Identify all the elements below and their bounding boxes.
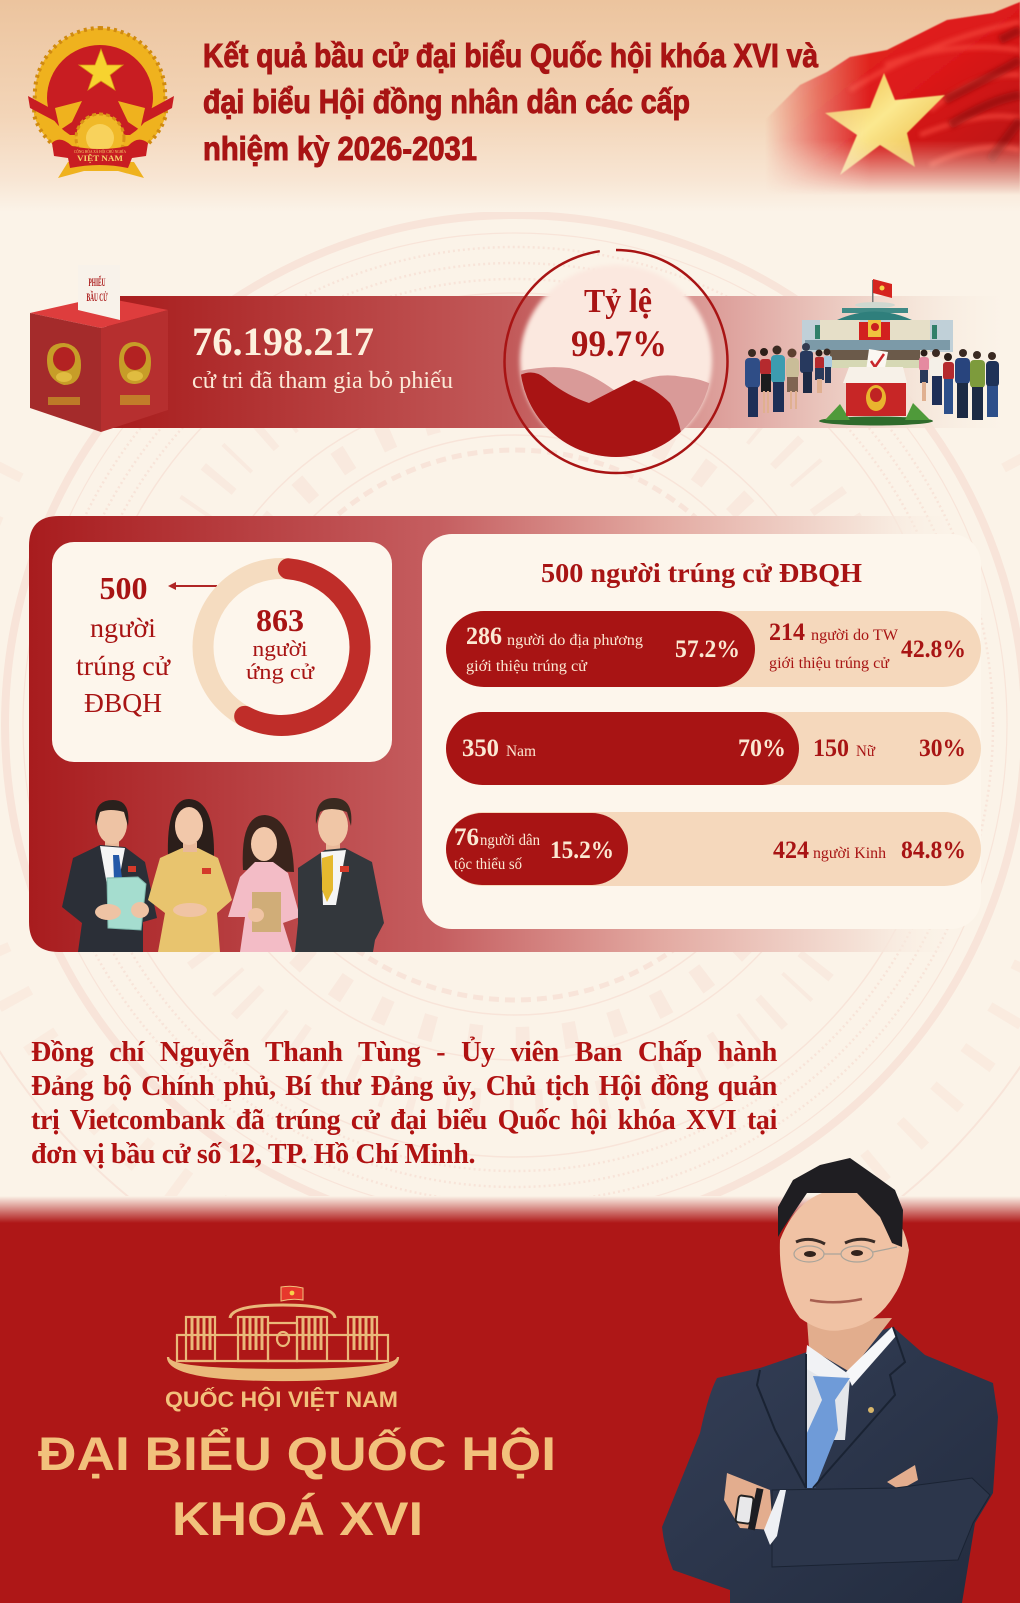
icon: national emblem: CỘNG HÒA XÃ HỘI CHỦ NGHĨA <box>74 149 126 154</box>
panel: candidates and elected breakdown <box>29 516 1000 952</box>
heading: 500 người trúng cử ĐBQH <box>541 558 862 588</box>
bar: nominating source: 286 <box>466 623 502 650</box>
shirt collars <box>805 1327 896 1386</box>
text block: Nguyễn Thanh Tùng statement: trị Vietcombank đã trúng cử đại biểu Quốc hội khóa XVI tại <box>31 1105 777 1136</box>
bar: ethnicity: người Kinh <box>813 845 886 862</box>
delegate: man with gold tie <box>295 798 384 952</box>
bar: nominating source: giới thiệu trúng cử <box>769 655 890 672</box>
icon: national emblem: VIỆT NAM <box>77 153 123 163</box>
ballot paper <box>78 265 120 320</box>
bar: ethnicity <box>446 812 981 886</box>
bar: nominating source: 214 <box>769 619 805 646</box>
bronze drum background pattern <box>0 212 1020 1196</box>
bar: ethnicity: tộc thiểu số <box>454 856 522 873</box>
folded arm <box>772 1478 990 1567</box>
bar: ethnicity: 424 <box>773 837 809 864</box>
candidates count text: ứng cử <box>246 659 315 684</box>
donut chart <box>196 562 367 732</box>
bar: gender <box>446 712 981 785</box>
elected count text: 500 <box>100 570 148 606</box>
ballot paper: PHIẾU <box>88 274 106 289</box>
bar: nominating source: 42.8% <box>901 636 966 663</box>
header background gradient <box>0 0 1020 212</box>
bar: ethnicity: 15.2% <box>550 837 614 864</box>
folded hands <box>724 1473 773 1530</box>
logo building <box>168 1305 398 1380</box>
card: 500 elected delegates <box>422 534 981 929</box>
icon: ballot box <box>30 265 168 432</box>
bar: gender: 350 <box>462 735 499 762</box>
card: candidates donut <box>52 542 392 762</box>
flag top right <box>760 2 1020 200</box>
bottom red panel <box>0 1196 1020 1603</box>
delegate: woman in pink ao dai <box>228 815 300 952</box>
chart: turnout gauge 99.7%: Tỷ lệ <box>584 283 652 320</box>
logo: Quốc hội Việt Nam <box>165 1286 398 1412</box>
voter crowd <box>745 343 999 420</box>
illustration: National Assembly building and voters <box>745 279 999 426</box>
bar: nominating source: giới thiệu trúng cử <box>466 658 588 675</box>
elected count text <box>76 570 171 718</box>
candidates count text: người <box>252 636 308 661</box>
bar: ethnicity: người dân <box>480 832 540 849</box>
glasses and eyes <box>794 1239 897 1302</box>
bar: ethnicity: 84.8% <box>901 837 966 864</box>
ballot box with check mark <box>819 349 933 426</box>
bar: ethnicity: 76 <box>454 824 479 851</box>
voter count: 76.198.217 <box>192 319 374 364</box>
wrist watch <box>735 1488 763 1530</box>
portrait: Nguyễn Thanh Tùng <box>662 1158 998 1603</box>
text block: Nguyễn Thanh Tùng statement: Đồng chí Nguyễn Thanh Tùng - Ủy viên Ban Chấp hành <box>31 1037 777 1068</box>
building <box>802 279 953 368</box>
heading: Đại biểu Quốc hội khoá XVI: ĐẠI BIỂU QUỐC HỘI <box>38 1427 556 1480</box>
title: đại biểu Hội đồng nhân dân các cấp <box>203 83 690 120</box>
text block: Nguyễn Thanh Tùng statement: đơn vị bầu cử số 12, TP. Hồ Chí Minh. <box>31 1139 475 1170</box>
text block: Nguyễn Thanh Tùng statement: Đảng bộ Chính phủ, Bí thư Đảng ủy, Chủ tịch Hội đồng quản <box>31 1071 777 1102</box>
text block: Nguyễn Thanh Tùng statement <box>31 1036 777 1170</box>
lapel shading <box>757 1327 905 1488</box>
title: Kết quả bầu cử đại biểu Quốc hội khóa XVI và <box>203 37 819 74</box>
logo flag <box>281 1286 303 1301</box>
candidates count text <box>246 602 315 684</box>
illustration: four delegates <box>62 798 384 952</box>
bar: nominating source: người do địa phương <box>507 632 643 649</box>
right group <box>919 349 999 420</box>
delegate: man with documents <box>62 800 157 952</box>
icon: national emblem <box>28 28 174 178</box>
bar: gender: 150 <box>813 735 849 762</box>
voter count <box>192 319 453 394</box>
neck <box>807 1318 892 1372</box>
head and face <box>780 1188 909 1331</box>
chart: turnout gauge 99.7% <box>504 250 728 473</box>
title: nhiệm kỳ 2026-2031 <box>203 130 477 167</box>
logo wordmark: QUỐC HỘI VIỆT NAM <box>165 1386 398 1412</box>
delegate: woman in yellow ao dai <box>148 799 232 952</box>
suit jacket <box>662 1327 998 1603</box>
bar: nominating source: 57.2% <box>675 636 740 663</box>
bar: gender: 30% <box>919 735 966 762</box>
bar: gender: Nữ <box>856 743 876 760</box>
bar: gender: Nam <box>506 743 537 760</box>
bar: nominating source <box>446 611 981 687</box>
elected count text: người <box>90 613 156 643</box>
elected count text: trúng cử <box>76 651 171 681</box>
arrow <box>168 582 217 590</box>
panel: voter turnout band <box>107 296 1007 428</box>
shirt <box>806 1352 850 1440</box>
hair <box>778 1158 903 1247</box>
left group <box>745 343 832 417</box>
chart: turnout gauge 99.7%: 99.7% <box>571 324 667 365</box>
ballot paper: BẦU CỬ <box>86 289 108 304</box>
candidates count text: 863 <box>256 602 304 638</box>
elected count text: ĐBQH <box>84 688 162 718</box>
bar: nominating source: người do TW <box>811 627 899 644</box>
voter count: cử tri đã tham gia bỏ phiếu <box>192 368 453 394</box>
bar: gender: 70% <box>738 735 786 762</box>
title <box>203 37 819 167</box>
heading: Đại biểu Quốc hội khoá XVI <box>38 1427 556 1545</box>
tie <box>806 1376 850 1488</box>
heading: Đại biểu Quốc hội khoá XVI: KHOÁ XVI <box>172 1492 423 1545</box>
